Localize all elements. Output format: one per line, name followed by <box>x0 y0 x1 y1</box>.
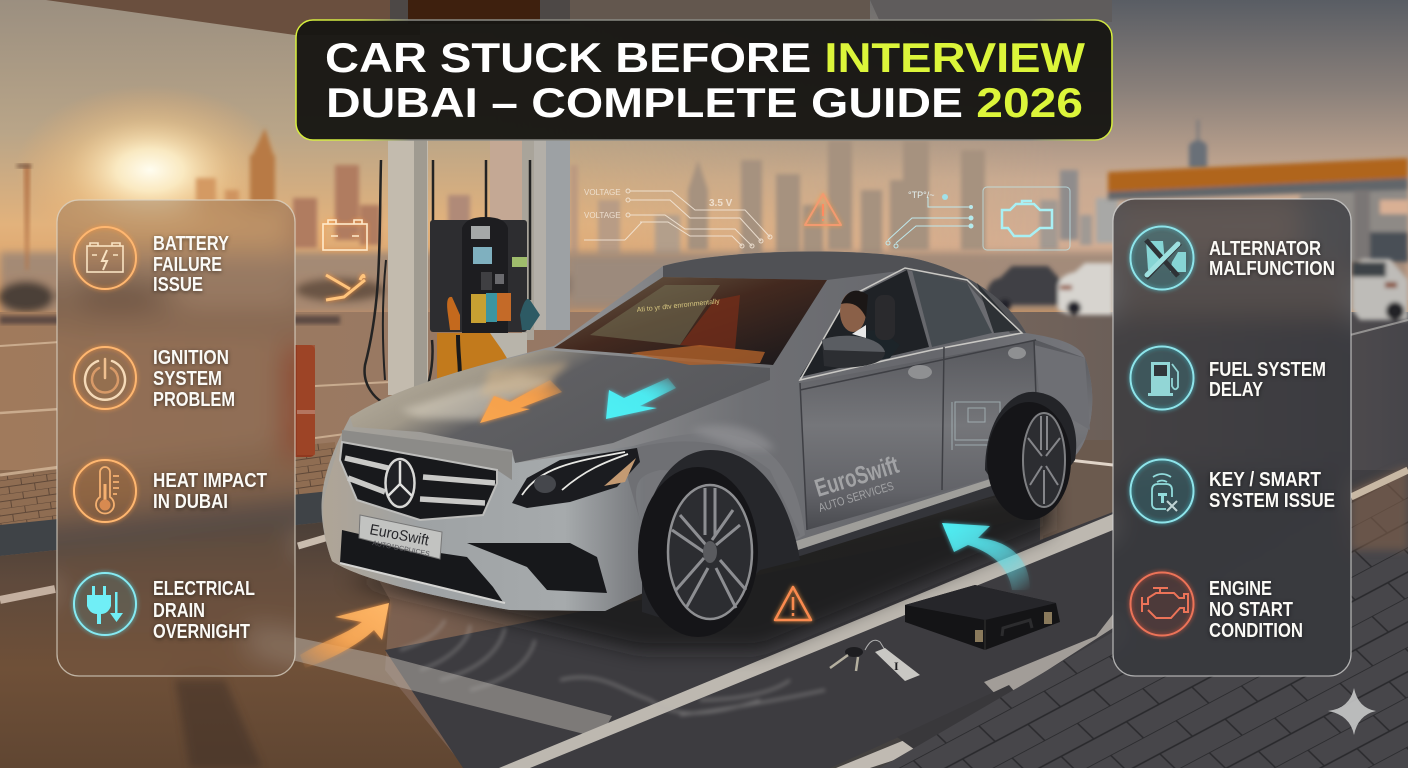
car keys: I <box>894 659 899 673</box>
item: fuel system: DELAY <box>1209 379 1264 401</box>
lower intakes <box>340 530 503 602</box>
front bumper <box>323 440 645 611</box>
item: engine no start: CONDITION <box>1209 620 1303 642</box>
parked cars background <box>985 259 1408 320</box>
fuel pump <box>430 217 540 390</box>
front wheel <box>638 450 800 637</box>
item: electrical drain: DRAIN <box>153 600 205 622</box>
item: alternator: ALTERNATOR <box>1209 238 1321 260</box>
item: alternator <box>1130 226 1335 290</box>
HUD: voltage circuit lines <box>584 188 772 248</box>
HUD: battery and wrench icons near pump <box>323 220 367 300</box>
car shadow <box>345 480 1050 650</box>
sparkle mark <box>1328 688 1376 735</box>
item: key smart system: KEY / SMART <box>1209 469 1321 491</box>
car: EuroSwift grey sedan <box>321 251 1092 650</box>
item: key smart system: SYSTEM ISSUE <box>1209 490 1335 512</box>
arrow: orange on hood <box>480 380 562 423</box>
side mirror <box>822 336 885 368</box>
sill <box>768 473 1012 560</box>
title banner <box>296 20 1112 140</box>
item: battery failure <box>74 227 230 296</box>
item: battery failure: BATTERY <box>153 233 230 255</box>
item: engine no start <box>1130 572 1303 642</box>
item: heat impact: HEAT IMPACT <box>153 470 267 492</box>
item: ignition system: SYSTEM <box>153 368 222 390</box>
right canopy & building <box>1108 158 1408 262</box>
item: heat impact: IN DUBAI <box>153 491 228 513</box>
door lettering <box>812 451 902 515</box>
panel: left causes <box>56 199 296 677</box>
item: fuel system: FUEL SYSTEM <box>1209 359 1326 381</box>
door lettering: AUTO SERVICES <box>817 479 895 515</box>
HUD: voltage circuit lines: VOLTAGE <box>584 211 621 220</box>
headlight <box>512 448 640 508</box>
HUD: voltage circuit lines: 3.5 V <box>709 198 733 209</box>
item: engine no start: NO START <box>1209 599 1293 621</box>
item: ignition system: IGNITION <box>153 347 229 369</box>
item: heat impact <box>74 460 267 522</box>
door schematic <box>952 402 1000 450</box>
hoses <box>365 160 530 405</box>
side windows <box>800 270 929 377</box>
door lines and handles <box>800 340 1036 530</box>
title banner: CAR STUCK BEFORE INTERVIEW <box>325 34 1085 81</box>
item: battery failure: FAILURE <box>153 254 222 276</box>
far trees <box>0 252 1408 315</box>
briefcase <box>905 585 1060 650</box>
item: key smart system <box>1130 460 1335 522</box>
item: electrical drain <box>74 573 255 643</box>
exhaust swirl marks <box>400 620 825 715</box>
asphalt bay <box>385 500 1113 768</box>
windshield <box>554 277 827 365</box>
top-left station canopy <box>46 0 420 35</box>
brick pavement right <box>880 465 1408 768</box>
arrow: orange lower left <box>300 603 389 668</box>
item: electrical drain: ELECTRICAL <box>153 578 255 600</box>
front licence plate: AUTO°DCPUICES <box>372 539 431 558</box>
item: battery failure: ISSUE <box>153 274 203 296</box>
hood <box>350 350 770 463</box>
item: ignition system <box>74 347 235 411</box>
item: electrical drain: OVERNIGHT <box>153 621 250 643</box>
warning triangle on ground <box>775 587 811 620</box>
title banner: DUBAI – COMPLETE GUIDE 2026 <box>326 79 1083 126</box>
HUD: engine diagnostic panel <box>886 187 1070 250</box>
ground <box>0 312 1408 492</box>
door panels <box>800 340 1092 530</box>
arrow: cyan on hood <box>606 378 676 419</box>
HUD: engine diagnostic panel: °TP°/~ <box>908 190 934 200</box>
car: EuroSwift grey sedan: Ati to yr dtv enrornmentally <box>636 298 721 314</box>
painted lines <box>250 514 1113 768</box>
front licence plate: EuroSwift <box>368 521 431 550</box>
rear wheel <box>985 392 1076 520</box>
item: alternator: MALFUNCTION <box>1209 258 1335 280</box>
station pillars <box>388 140 428 395</box>
item: engine no start: ENGINE <box>1209 578 1272 600</box>
grille <box>340 442 497 520</box>
item: fuel system <box>1130 346 1326 410</box>
red extinguisher <box>282 345 315 457</box>
HUD: voltage circuit lines: VOLTAGE <box>584 188 621 197</box>
car body <box>321 251 1092 611</box>
HUD: warning triangle <box>805 194 841 225</box>
driver <box>840 291 900 366</box>
item: ignition system: PROBLEM <box>153 389 235 411</box>
brick sidewalk left <box>0 442 340 525</box>
arrow: cyan curved up from briefcase <box>942 523 1030 590</box>
panel: right causes <box>1112 198 1352 677</box>
door lettering: EuroSwift <box>812 451 902 503</box>
car keys <box>830 640 920 681</box>
front licence plate <box>359 515 442 559</box>
roof <box>663 251 1026 333</box>
